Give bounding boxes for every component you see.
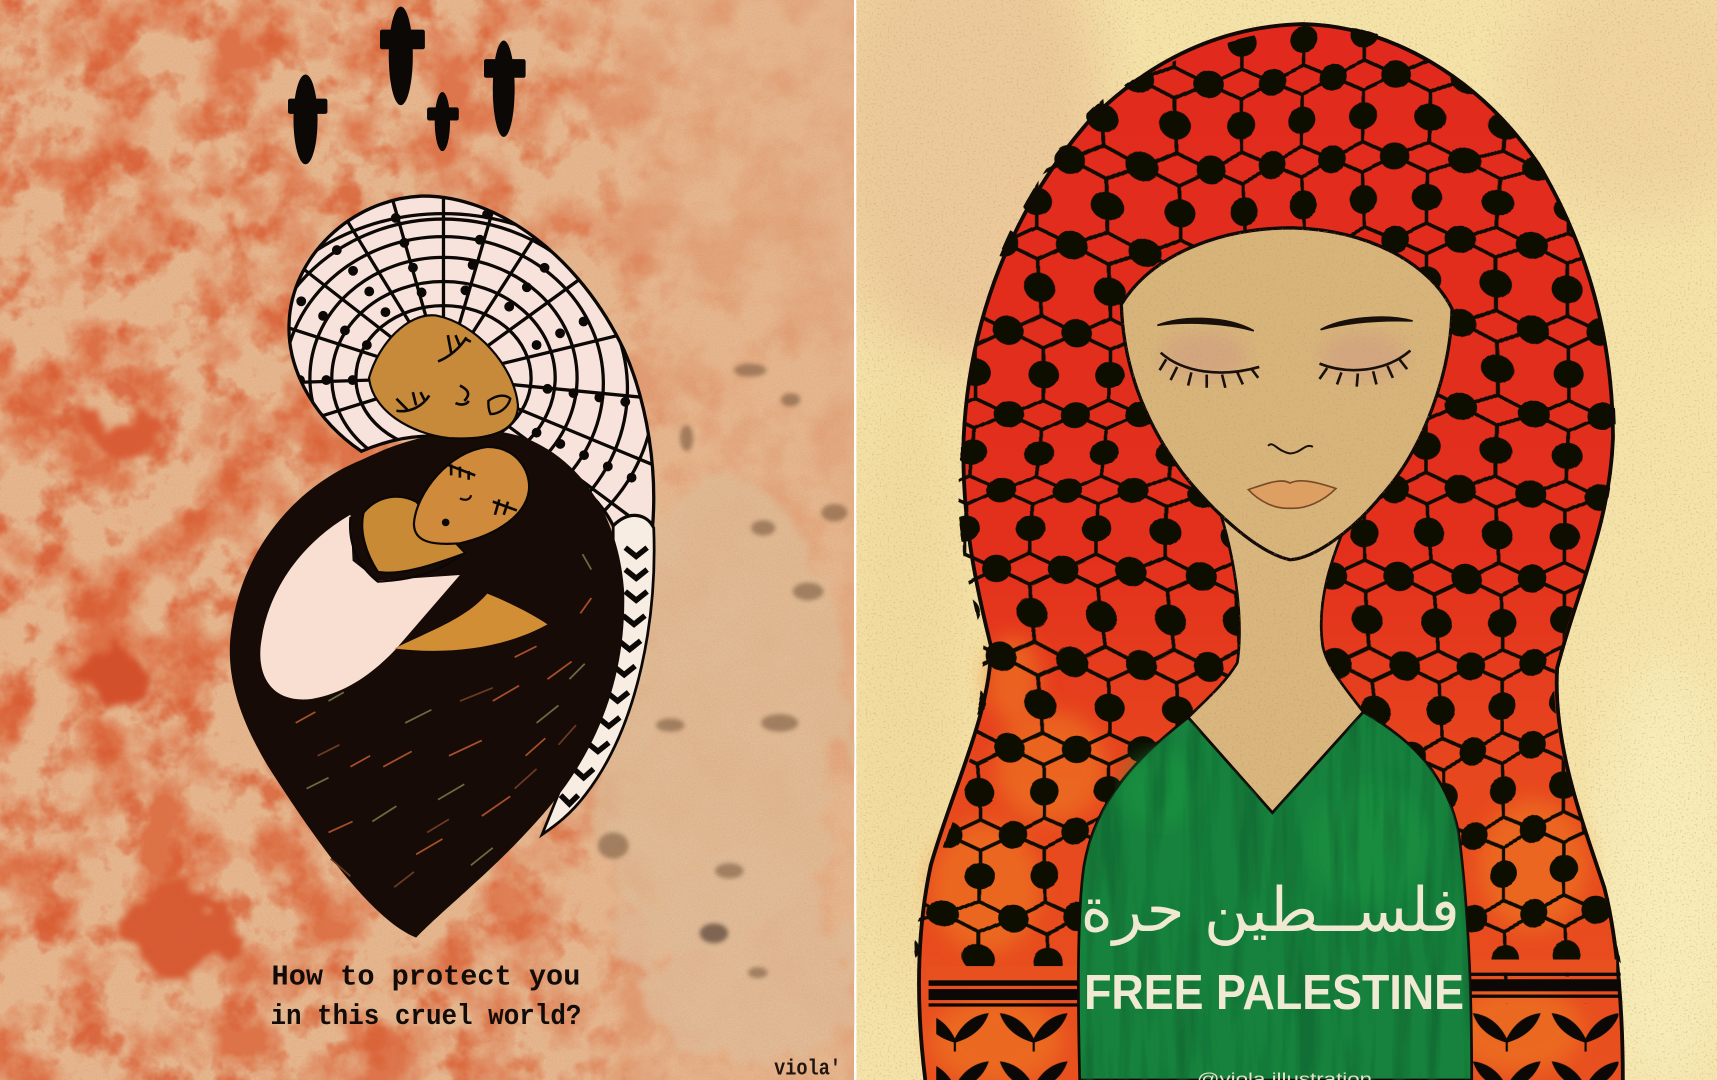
red band behind stripes (926, 960, 1616, 981)
hair scarf (919, 24, 1623, 1080)
leaf pattern left (936, 1008, 1084, 1080)
dark robe (230, 430, 624, 938)
mother face (369, 315, 518, 438)
caption: How to protect you (272, 961, 580, 994)
keffiyeh net (919, 24, 1623, 975)
face (1117, 219, 1456, 822)
right eye (1320, 351, 1410, 387)
left eye (1160, 353, 1259, 388)
cheek blush (1161, 332, 1248, 380)
free palestine slogan: FREE PALESTINE (1084, 965, 1464, 1020)
mother arm (394, 594, 548, 651)
panel: mother and child watercolor (0, 0, 854, 1080)
neck (1188, 509, 1363, 813)
left eyebrow (1157, 318, 1254, 331)
watercolor background (0, 0, 854, 1080)
arabic slogan: فلســطين حرة (1081, 875, 1460, 946)
black stripe border (929, 973, 1621, 1007)
scarf (287, 194, 656, 529)
figure: mother holding baby (230, 186, 668, 938)
cream background (821, 0, 1717, 1080)
green shirt (1078, 712, 1473, 1080)
crosses (288, 7, 526, 164)
hair outline (919, 24, 1623, 1080)
orange patches (931, 635, 1588, 1080)
robe hatching (285, 554, 591, 887)
nose (1268, 444, 1313, 453)
lips (1248, 481, 1336, 508)
baby head (414, 447, 529, 544)
baby blanket (260, 515, 460, 699)
scarf fringe (542, 511, 654, 835)
panel: woman in keffiyeh (821, 0, 1717, 1080)
brown paint specks (598, 364, 848, 978)
leaf pattern right (1467, 1003, 1618, 1080)
skin speckle (1117, 219, 1456, 822)
baby shoulder (362, 497, 465, 573)
right eyebrow (1321, 317, 1413, 330)
caption second line: in this cruel world? (270, 1000, 581, 1033)
